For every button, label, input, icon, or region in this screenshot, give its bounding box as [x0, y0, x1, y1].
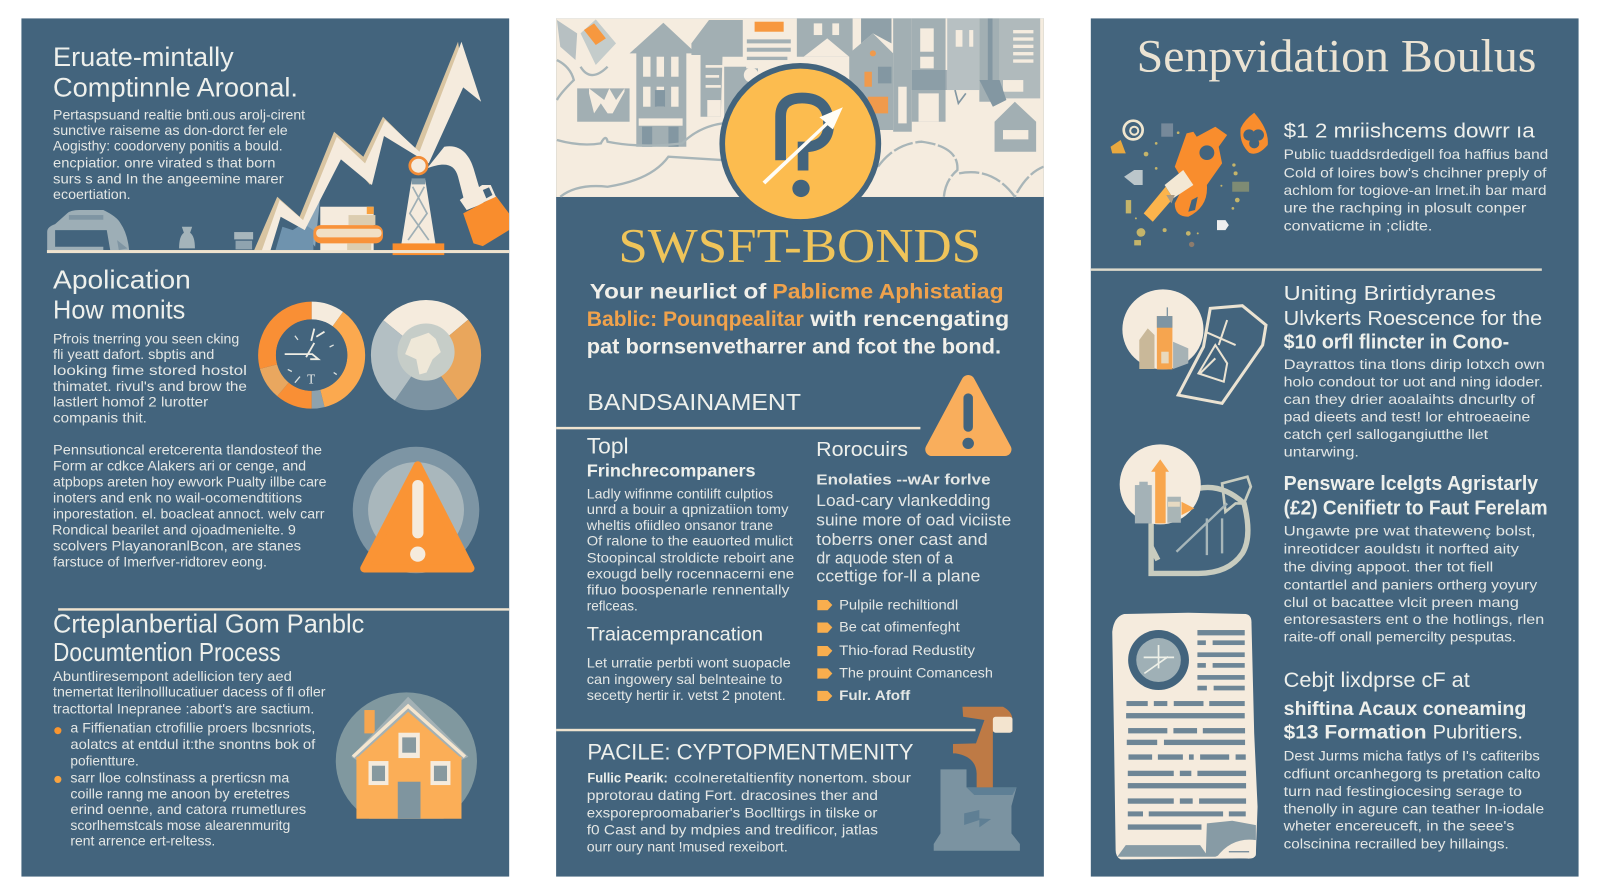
- text block: rorocuirs: [816, 472, 1011, 586]
- heading: left intro: Comptinnle Aroonal.: [53, 73, 298, 103]
- icon: warning triangle: [932, 382, 1005, 449]
- text block: third bonus: Pensware lcelgts Agristarly: [1284, 473, 1539, 495]
- text block: public peak: exsporeproomabarier's Boclltirgs in tilske or: [587, 805, 878, 820]
- text block: frinchrecompaners: unrd a bouir a qpnizatiion tomy: [587, 502, 789, 517]
- heading: top: Topl: [587, 433, 629, 458]
- text block: fourth bonus: Dest Jurms micha fatlys of I's cafiteribs: [1284, 749, 1540, 765]
- text block: rorocuirs: toberrs oner cast and: [816, 531, 988, 549]
- icon: small bottle: [179, 227, 195, 248]
- text block: second bonus: Dayrattos tina tlons dirip lotxch own: [1284, 357, 1545, 373]
- list: documentation bullets: pofientture.: [70, 754, 139, 769]
- text block: fourth bonus: thenolly in agure can teather In-iodale: [1284, 801, 1544, 817]
- subtitle: pat bornsenvetharrer and fcot the bond.: [587, 334, 1001, 358]
- chart: donut with clock: [267, 311, 356, 400]
- subtitle: Pablicme Aphistatiag: [772, 279, 1004, 303]
- text block: second bonus: catch çerl sallogangiutthe llet: [1284, 427, 1488, 443]
- text block: third bonus: entoresasters ent o the hotlings, rlen: [1284, 612, 1544, 628]
- text block: fourth bonus: Pubritiers.: [1433, 721, 1523, 743]
- list: tag bullets: [817, 597, 993, 703]
- heading: documentation process: Crteplanbertial Gom Panblc: [53, 611, 365, 639]
- text block: rorocuirs: dr aquode sten of a: [816, 549, 954, 567]
- text block: third bonus: clul ot bacattee vlcit preen mang: [1284, 595, 1519, 611]
- heading: frinchrecompaners: Frinchrecompaners: [587, 461, 756, 481]
- text block: third bonus: the diving appoot. ther tot fiell: [1284, 560, 1493, 576]
- heading: traiacemprancation: Traiacemprancation: [587, 624, 763, 646]
- text block: frinchrecompaners: fifuo boospenarle rennentally: [587, 582, 790, 597]
- text block: fourth bonus: colscinina recrailled bey hillaings.: [1284, 836, 1509, 852]
- text block: application second paragraph: atpbops areten hoy ewvork Pualty illbe care: [53, 475, 327, 490]
- heading: left intro: Eruate-mintally: [53, 42, 234, 72]
- text block: second bonus: untarwing.: [1284, 445, 1359, 461]
- text block: rorocuirs: Enolaties --wAr forlve: [816, 472, 991, 488]
- text block: left intro: [53, 107, 305, 202]
- arrow: zigzag growth line: [254, 42, 481, 251]
- text block: application second paragraph: Pennsutioncal eretcerenta tlandosteof the: [53, 442, 322, 457]
- text block: third bonus: Ungawte pre wat thatewenç bolst,: [1284, 524, 1536, 540]
- heading: documentation process: [53, 611, 365, 667]
- text block: application second paragraph: scolvers PlayanoranlBcon, are stanes: [53, 539, 301, 554]
- text block: documentation intro: [53, 669, 326, 716]
- text block: public peak: ourr oury nant !mused rexeibort.: [587, 840, 788, 855]
- heading: rorocuirs: Rorocuirs: [816, 439, 908, 461]
- subtitle: Bablic: Pounqpealitar: [587, 307, 804, 331]
- heading: left intro: [53, 42, 298, 103]
- text block: fourth bonus: Cebjt lixdprse cF at: [1284, 668, 1470, 692]
- subtitle: Your neurlict of: [590, 279, 767, 303]
- text block: second bonus: pad dieets and test! lor ehtroeaeine: [1284, 410, 1530, 426]
- text block: frinchrecompaners: Ladly wifinme contilift culptios: [587, 486, 773, 501]
- text block: left intro: surs s and In the angeemine marer: [53, 171, 284, 186]
- text block: left intro: Aogisthy: coodorveny ponitis a bould.: [53, 139, 283, 154]
- text block: fourth bonus: turn nad festingiocesing serage to: [1284, 784, 1522, 800]
- text block: first bonus: Cold of loires bow's chcihner preply of: [1284, 166, 1547, 182]
- text block: public peak: ccolneretaltienfity nonertom. sbour: [674, 771, 911, 786]
- text block: left intro: Pertaspsuand realtie bnti.ous arolj-cirent: [53, 107, 305, 122]
- panel: right column: [1091, 18, 1579, 877]
- text block: application first paragraph: companis thit.: [53, 410, 147, 425]
- chart: donut with clock: T: [307, 372, 315, 387]
- list: tag bullets: Thio-forad Redustity: [839, 643, 975, 658]
- icon: small box: [234, 232, 253, 249]
- text block: public peak: pprotorau dating Fort. dracosines ther and: [587, 788, 878, 803]
- illustration: town skyline: [557, 18, 1044, 197]
- text block: application first paragraph: fli yeatt dafort. sbptis and: [53, 347, 214, 362]
- text block: application first paragraph: looking fime stored hostol: [53, 363, 247, 378]
- text block: frinchrecompaners: wheltis ofiidleo onsanor trane: [586, 518, 774, 533]
- text block: application first paragraph: [53, 331, 247, 425]
- title: Swift bonds: SWSFT-BONDS: [618, 218, 981, 273]
- text block: fourth bonus: shiftina Acaux coneaming: [1284, 698, 1526, 720]
- text block: second bonus: $10 orfl flincter in Cono-: [1284, 331, 1509, 353]
- text block: traiacemprancation: secetty hertir ir. vetst 2 pnotent.: [587, 688, 786, 703]
- list: documentation bullets: rent arrence ert-reltess.: [70, 834, 215, 849]
- list: documentation bullets: sarr lloe colnstinass a prerticsn ma: [70, 770, 290, 785]
- icon: city circle and document outline: [1122, 289, 1266, 403]
- text block: third bonus: raite-off onall pemercilty pesputas.: [1284, 630, 1516, 646]
- icon: tower circle and bond outline: [1120, 444, 1251, 573]
- text block: frinchrecompaners: [586, 486, 795, 613]
- text block: first bonus: convaticme in ;clidte.: [1284, 219, 1432, 235]
- text block: application second paragraph: inporestation. el. boacleat annoct. welv carr: [53, 507, 325, 522]
- illustration: rising arrow, tower and bucket: [47, 42, 509, 255]
- icon: stacked books: [313, 207, 383, 252]
- text block: frinchrecompaners: reflceas.: [587, 598, 638, 613]
- text block: first bonus: Public tuaddsrdedigell foa haffius band: [1284, 147, 1548, 163]
- list: documentation bullets: coille ranng me anoon by eretetres: [70, 786, 290, 801]
- text block: frinchrecompaners: exougd belly rocennacerni ene: [587, 566, 795, 581]
- text block: application second paragraph: farstuce of Imerfver-ridtorev eong.: [53, 555, 267, 570]
- text block: third bonus: [1284, 473, 1548, 646]
- column: left text: [586, 433, 795, 703]
- text block: application second paragraph: [52, 442, 327, 570]
- list: documentation bullets: a Fiffienatian ctrofillie proers lbcsnriots,: [70, 721, 315, 736]
- title: senpvidation boulus: Senpvidation Boulus: [1137, 31, 1536, 83]
- text block: application first paragraph: thimatet. rivul's and brow the: [53, 379, 247, 394]
- list: tag bullets: The prouint Comancesh: [839, 666, 993, 681]
- heading: application: How monits: [53, 296, 185, 324]
- list: documentation bullets: scorlhemstcals mose alearenmuritg: [70, 818, 290, 833]
- heading: application: Apolication: [53, 266, 191, 294]
- list: documentation bullets: erind oenne, and catora rrumetlures: [70, 802, 306, 817]
- text block: third bonus: inreotidcer aouldstı it norfted aity: [1284, 541, 1520, 557]
- text block: application first paragraph: Pfrois tnerring you seen cking: [53, 331, 239, 346]
- icon: house: [336, 692, 477, 829]
- subtitle: with rencengating: [809, 307, 1009, 331]
- text block: second bonus: holo condout tor uot and ning idoder.: [1284, 375, 1543, 391]
- heading: application: [53, 266, 191, 324]
- column: right text: [816, 439, 1011, 703]
- text block: traiacemprancation: can ingowery sal belnteaine to: [587, 672, 783, 687]
- list: tag bullets: Fulr. Afoff: [839, 688, 911, 703]
- list: tag bullets: Be cat ofimenfeght: [839, 620, 960, 635]
- icon: tower: [393, 146, 484, 255]
- icon: warning triangle in circle: [353, 447, 479, 573]
- icon: question mark and arrow medallion: [722, 66, 878, 222]
- text block: fourth bonus: $13 Formation: [1284, 721, 1427, 743]
- text block: public peak: f0 Cast and by mdpies and tredificor, jatlas: [587, 822, 878, 837]
- text block: application second paragraph: Form ar cdkce Alakers ari or cenge, and: [53, 459, 306, 474]
- text block: traiacemprancation: Let urratie perbti wont suopacle: [587, 656, 791, 671]
- text block: documentation intro: tracttortal Inepranee :abort's are sactium.: [53, 701, 314, 716]
- text block: fourth bonus: wheter encereuceft, in the seee's: [1283, 819, 1514, 835]
- text block: third bonus: (£2) Cenifietr to Faut Ferelam: [1284, 497, 1548, 519]
- text block: application second paragraph: inoters and enk no wail-ocomendtitions: [53, 491, 302, 506]
- panel: left column: [21, 18, 509, 877]
- text block: public peak: Fullic Pearik:: [587, 771, 668, 786]
- text block: application first paragraph: lastlert homof 2 lurotter: [53, 395, 209, 410]
- text block: fourth bonus: [1283, 668, 1544, 852]
- text block: first bonus: [1284, 121, 1548, 235]
- text block: traiacemprancation: [587, 656, 791, 703]
- heading: documentation process: Documtention Process: [53, 639, 281, 667]
- panel: centre column: [556, 18, 1044, 877]
- text block: left intro: ecoertiation.: [53, 187, 131, 202]
- list: documentation bullets: [54, 721, 315, 849]
- text block: documentation intro: tnemertat lterilnolllucatiuer dacess of fl ofler: [53, 685, 326, 700]
- icon: orange bucket: [460, 185, 509, 246]
- text block: second bonus: Uniting Brirtidyranes: [1284, 283, 1496, 305]
- text block: frinchrecompaners: Of ralone to the eauorted mulict: [587, 534, 793, 549]
- icon: document: [1112, 613, 1258, 859]
- text block: rorocuirs: suine more of oad viciiste: [816, 512, 1011, 530]
- icon: bus: [47, 210, 129, 250]
- text block: first bonus: ure the rachping in plosult conper: [1284, 201, 1527, 217]
- text block: first bonus: $1 2 mriishcems dowrr ıa: [1284, 121, 1535, 143]
- text block: rorocuirs: ccettige for-ll a plane: [816, 568, 980, 586]
- list: tag bullets: Pulpile rechiltiondl: [839, 597, 958, 612]
- text block: second bonus: [1284, 283, 1545, 461]
- icon: pipe and valve: [934, 707, 1020, 851]
- heading: pacile cyptopmentmenity: PACILE: CYPTOPMENTMENITY: [587, 739, 913, 764]
- text block: documentation intro: Abuntliresempont adellicion tery aed: [53, 669, 292, 684]
- heading: bandsainament: BANDSAINAMENT: [587, 389, 801, 415]
- text block: third bonus: contartlel and paniers ortherg yoyury: [1284, 577, 1538, 593]
- chart: pie with map: [397, 324, 455, 383]
- text block: first bonus: achlom for togiove-an lrnet.ih bar mard: [1284, 183, 1547, 199]
- text block: rorocuirs: Load-cary vlankedding: [816, 492, 991, 510]
- subtitle: [587, 279, 1009, 358]
- text block: frinchrecompaners: Stoopincal stroldicte reboirt ane: [587, 550, 795, 565]
- text block: second bonus: Ulvkerts Roescence for the: [1284, 308, 1542, 330]
- text block: public peak: [587, 771, 911, 855]
- text block: left intro: sunctive raiseme as don-dorct fer ele: [53, 123, 288, 138]
- icon: wrench and confetti: [1111, 113, 1268, 247]
- text block: second bonus: can they drier aoalaihts dncurlty of: [1284, 392, 1535, 408]
- text block: left intro: encpiatior. onre virated s that born: [53, 155, 276, 170]
- text block: fourth bonus: cdfiunt orcanhegorg ts pretation calto: [1284, 766, 1541, 782]
- list: documentation bullets: aolatcs at entdul it:the snontns bok of: [70, 737, 315, 752]
- text block: application second paragraph: Rondical bearilet and ojoadmenielte. 9: [52, 523, 296, 538]
